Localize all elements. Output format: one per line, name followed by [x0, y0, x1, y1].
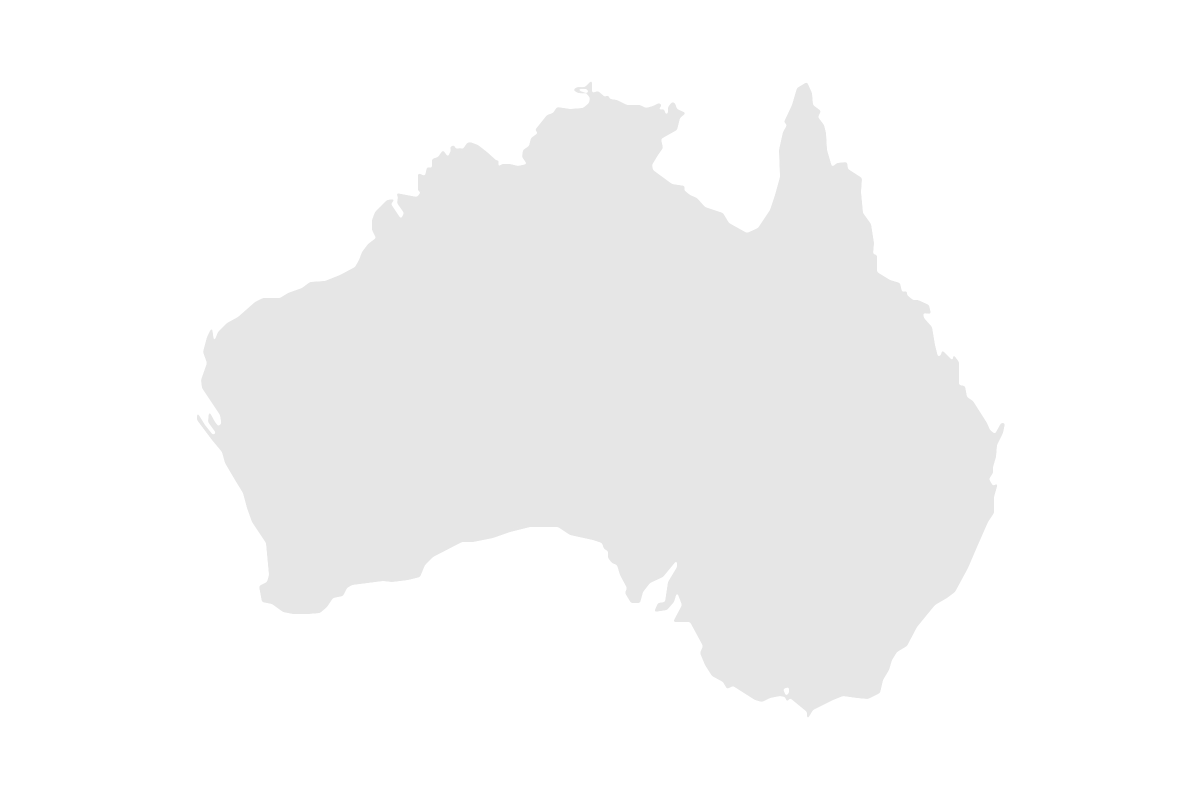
- landmass: mainland Australia: [197, 80, 1005, 720]
